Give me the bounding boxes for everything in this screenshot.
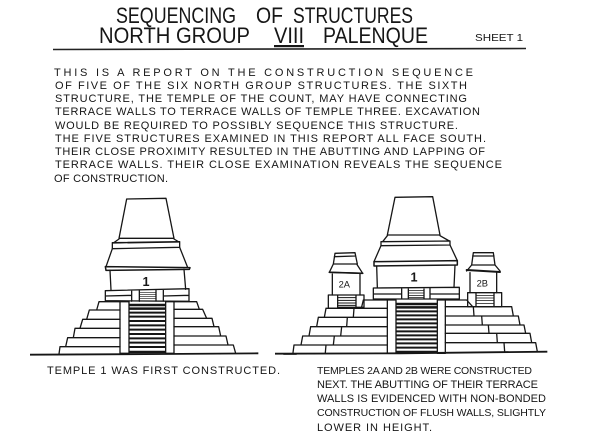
caption: temples 2A and 2B: TEMPLES 2A AND 2B WERE CONSTRUCTED: [317, 365, 532, 377]
report text block: [54, 67, 502, 185]
title: OF: [256, 3, 283, 28]
title: VIII: [274, 23, 304, 48]
caption: temples 2A and 2B: WALLS IS EVIDENCED WITH NON-BONDED: [317, 393, 546, 405]
temple 2B: 2B: [477, 278, 488, 288]
title: [99, 3, 428, 48]
caption: temples 2A and 2B: CONSTRUCTION OF FLUSH WALLS, SLIGHTLY: [317, 407, 546, 419]
temple 1 label: 1: [142, 275, 150, 289]
report text block: OF CONSTRUCTION.: [54, 173, 168, 185]
temple 2A: 2A: [339, 279, 351, 289]
temple 1 elevation drawing: [30, 198, 297, 355]
ground line: [275, 352, 547, 354]
report text block: TERRACE WALLS. THEIR CLOSE EXAMINATION REVEALS THE SEQUENCE: [55, 159, 502, 171]
report text block: OF FIVE OF THE SIX NORTH GROUP STRUCTURES. THE SIXTH: [55, 80, 467, 92]
temple 1: 1: [410, 270, 418, 284]
temple 2B: [467, 253, 502, 307]
title: NORTH GROUP: [99, 23, 250, 48]
sheet number: SHEET 1: [475, 33, 524, 44]
report text block: THE FIVE STRUCTURES EXAMINED IN THIS REPORT ALL FACE SOUTH.: [55, 133, 486, 145]
report text block: STRUCTURE, THE TEMPLE OF THE COUNT, MAY HAVE CONNECTING: [55, 93, 467, 105]
central stairway: [387, 300, 445, 353]
report text block: WOULD BE REQUIRED TO POSSIBLY SEQUENCE THIS STRUCTURE.: [55, 120, 458, 132]
caption: temples 2A and 2B: NEXT. THE ABUTTING OF THEIR TERRACE: [317, 379, 538, 391]
temple 2A: [328, 253, 364, 308]
report text block: THIS IS A REPORT ON THE CONSTRUCTION SEQUENCE: [54, 67, 473, 79]
report text block: THEIR CLOSE PROXIMITY RESULTED IN THE ABUTTING AND LAPPING OF: [55, 146, 485, 158]
terraces: [293, 300, 537, 353]
caption: temple 1: TEMPLE 1 WAS FIRST CONSTRUCTED.: [47, 365, 280, 377]
temples 1, 2A and 2B elevation drawing: [275, 197, 547, 354]
caption: temples 2A and 2B: [317, 365, 546, 434]
title: STRUCTURES: [293, 3, 413, 28]
temple 1: [373, 197, 459, 299]
heading rule: [53, 48, 526, 50]
caption: temples 2A and 2B: LOWER IN HEIGHT.: [317, 422, 432, 434]
title: PALENQUE: [323, 23, 428, 48]
title: SEQUENCING: [116, 3, 236, 28]
report text block: TERRACE WALLS TO TERRACE WALLS OF TEMPLE THREE. EXCAVATION: [55, 106, 480, 118]
